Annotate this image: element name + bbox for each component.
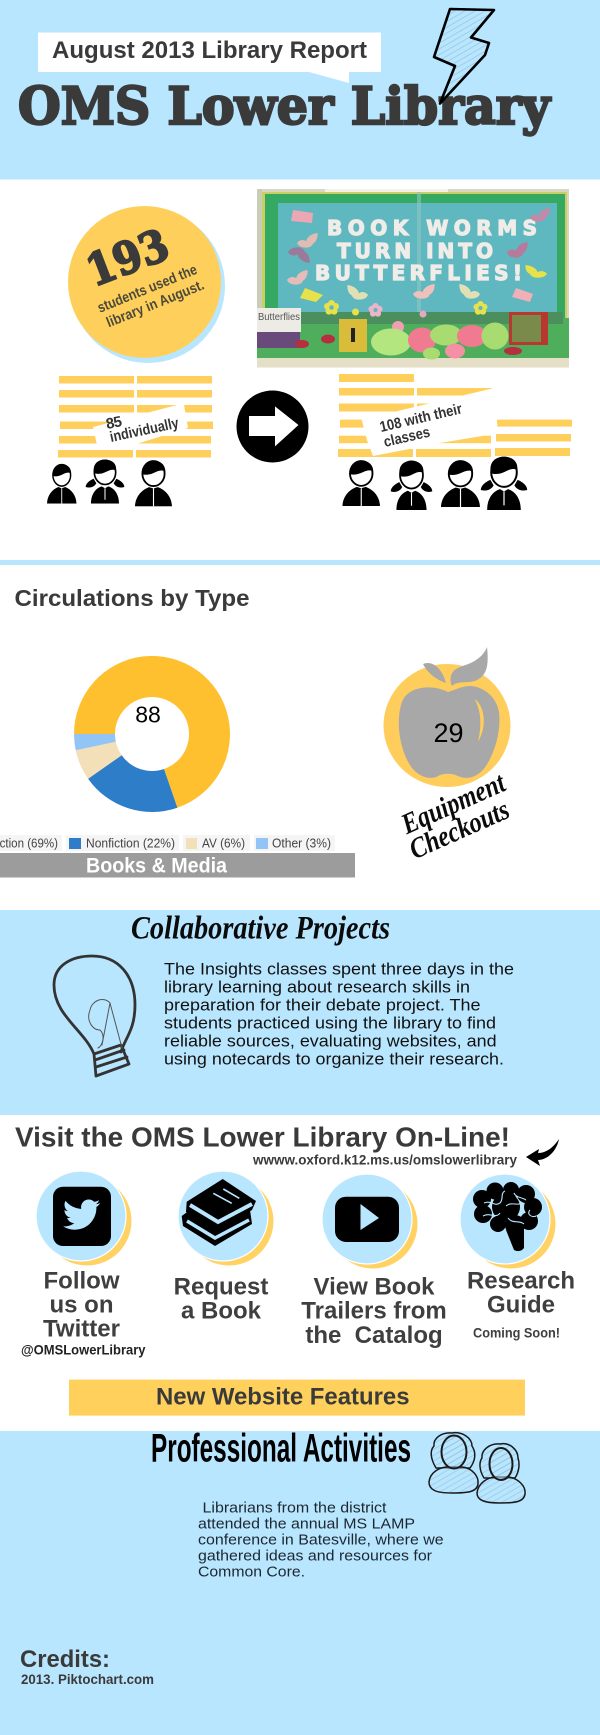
- callout: 108 with their classes: classes: [382, 424, 432, 451]
- icon: apple with equipment count: 29: [433, 718, 464, 748]
- label: view book trailers: View Book: [314, 1274, 435, 1300]
- photo books and caterpillar: [257, 308, 548, 360]
- label: view book trailers: [301, 1274, 447, 1349]
- panel: class bars: [338, 374, 572, 457]
- icon: video play: [322, 1174, 418, 1268]
- panel: collaborative projects: [0, 910, 600, 1115]
- label: view book trailers: Trailers from: [301, 1298, 447, 1324]
- label: equipment checkouts: Equipment: [396, 766, 511, 841]
- icons: three students: [47, 460, 172, 506]
- label: request a book: Request: [174, 1274, 268, 1300]
- text: collaborative paragraph: preparation for their debate project. The: [164, 997, 480, 1015]
- icon: lightning bolt: [434, 9, 494, 104]
- stat: 193 students circle: [68, 206, 225, 363]
- text: professional paragraph: [198, 1500, 444, 1580]
- photo lettering: BUTTERFLIES!: [315, 261, 522, 285]
- text: collaborative paragraph: students practiced using the library to find: [164, 1015, 496, 1033]
- text: professional paragraph: conference in Batesville, where we: [198, 1532, 444, 1548]
- text: professional paragraph: attended the annual MS LAMP: [198, 1516, 415, 1532]
- label: equipment checkouts: Checkouts: [404, 794, 514, 866]
- label: request a book: [174, 1274, 268, 1324]
- stat: 193 students circle: 193: [79, 220, 176, 297]
- label: follow us on twitter: Follow: [44, 1268, 120, 1294]
- label: follow us on twitter: [43, 1268, 120, 1342]
- text: collaborative paragraph: library learning about research skills in: [164, 978, 470, 996]
- icons: four students: [342, 457, 527, 510]
- callout: 108 with their classes: [362, 388, 498, 456]
- label: view book trailers: the Catalog: [305, 1322, 443, 1349]
- callout: 85 individually: individually: [108, 415, 181, 446]
- label: coming soon: Coming Soon!: [473, 1325, 560, 1341]
- stat: 193 students circle: students used the: [95, 262, 200, 317]
- icon: two sketched people: [429, 1433, 525, 1503]
- icon: light bulb: [54, 956, 135, 1076]
- text: collaborative paragraph: using notecards to organize their research.: [164, 1050, 504, 1068]
- photo: book worms bulletin board: [257, 189, 569, 368]
- chart legend: Other (3%): [272, 836, 331, 850]
- photo lettering: [315, 216, 537, 285]
- speech bubble subtitle: August 2013 Library Report: [52, 37, 367, 64]
- label: follow us on twitter: us on: [50, 1292, 114, 1318]
- credits: [20, 1646, 154, 1687]
- donut chart: [74, 656, 230, 812]
- speech bubble subtitle: [38, 32, 381, 83]
- label: research guide: Guide: [487, 1292, 555, 1318]
- photo books and caterpillar: Butterflies: [258, 312, 300, 323]
- banner: new website features: New Website Features: [156, 1384, 410, 1411]
- icon: books: [178, 1171, 274, 1266]
- panel: professional activities: [0, 1426, 600, 1735]
- label: follow us on twitter: Twitter: [43, 1315, 120, 1342]
- icon: curved arrow: [526, 1139, 559, 1166]
- divider strip: [0, 560, 600, 565]
- panel: header: [0, 0, 600, 180]
- callout: 85 individually: 85: [105, 413, 123, 433]
- photo lettering: BOOK WORMS: [327, 216, 537, 240]
- chart legend: [0, 835, 335, 851]
- photo butterflies and flowers: [287, 208, 550, 333]
- label: research guide: [467, 1268, 575, 1318]
- icon: twitter: [36, 1171, 132, 1266]
- text: professional paragraph: Librarians from the district: [202, 1500, 387, 1517]
- heading: professional activities: Professional Activities: [151, 1426, 411, 1470]
- callout: 108 with their classes: 108 with their: [378, 400, 464, 436]
- label bar: books and media: Books & Media: [86, 854, 228, 878]
- label bar: books and media: [0, 853, 355, 878]
- icon: arrow in circle: [236, 390, 308, 462]
- title: OMS Lower Library: [18, 77, 551, 137]
- text: collaborative paragraph: [164, 960, 514, 1068]
- label: research guide: Research: [467, 1268, 575, 1294]
- heading: collaborative projects: Collaborative Projects: [131, 911, 390, 947]
- banner: new website features: [69, 1380, 525, 1416]
- heading: visit online: Visit the OMS Lower Library On-Line!: [15, 1122, 510, 1153]
- icon: brain: [460, 1174, 556, 1268]
- donut chart: 88: [135, 702, 161, 728]
- label: request a book: a Book: [181, 1298, 262, 1324]
- text: collaborative paragraph: reliable sources, evaluating websites, and: [164, 1032, 497, 1050]
- text: professional paragraph: Common Core.: [198, 1564, 305, 1580]
- chart legend: Nonfiction (22%): [86, 836, 175, 850]
- credits: 2013. Piktochart.com: [21, 1672, 154, 1687]
- photo grass: [257, 318, 569, 358]
- credits: Credits:: [20, 1646, 110, 1673]
- callout: 85 individually: [93, 405, 188, 446]
- heading: circulations: Circulations by Type: [14, 585, 250, 611]
- text: website url: wwww.oxford.k12.ms.us/omslowerlibrary: [252, 1153, 517, 1168]
- panel: individual bars: [58, 376, 213, 458]
- icon: apple with equipment count: [384, 647, 510, 787]
- text: professional paragraph: gathered ideas and resources for: [198, 1548, 432, 1564]
- label: equipment checkouts: [396, 766, 514, 866]
- stat: 193 students circle: library in August.: [104, 277, 207, 331]
- label: twitter handle: @OMSLowerLibrary: [21, 1341, 146, 1357]
- photo lettering: TURN INTO: [337, 239, 493, 263]
- chart legend: AV (6%): [202, 836, 245, 850]
- text: collaborative paragraph: The Insights classes spent three days in the: [164, 960, 514, 978]
